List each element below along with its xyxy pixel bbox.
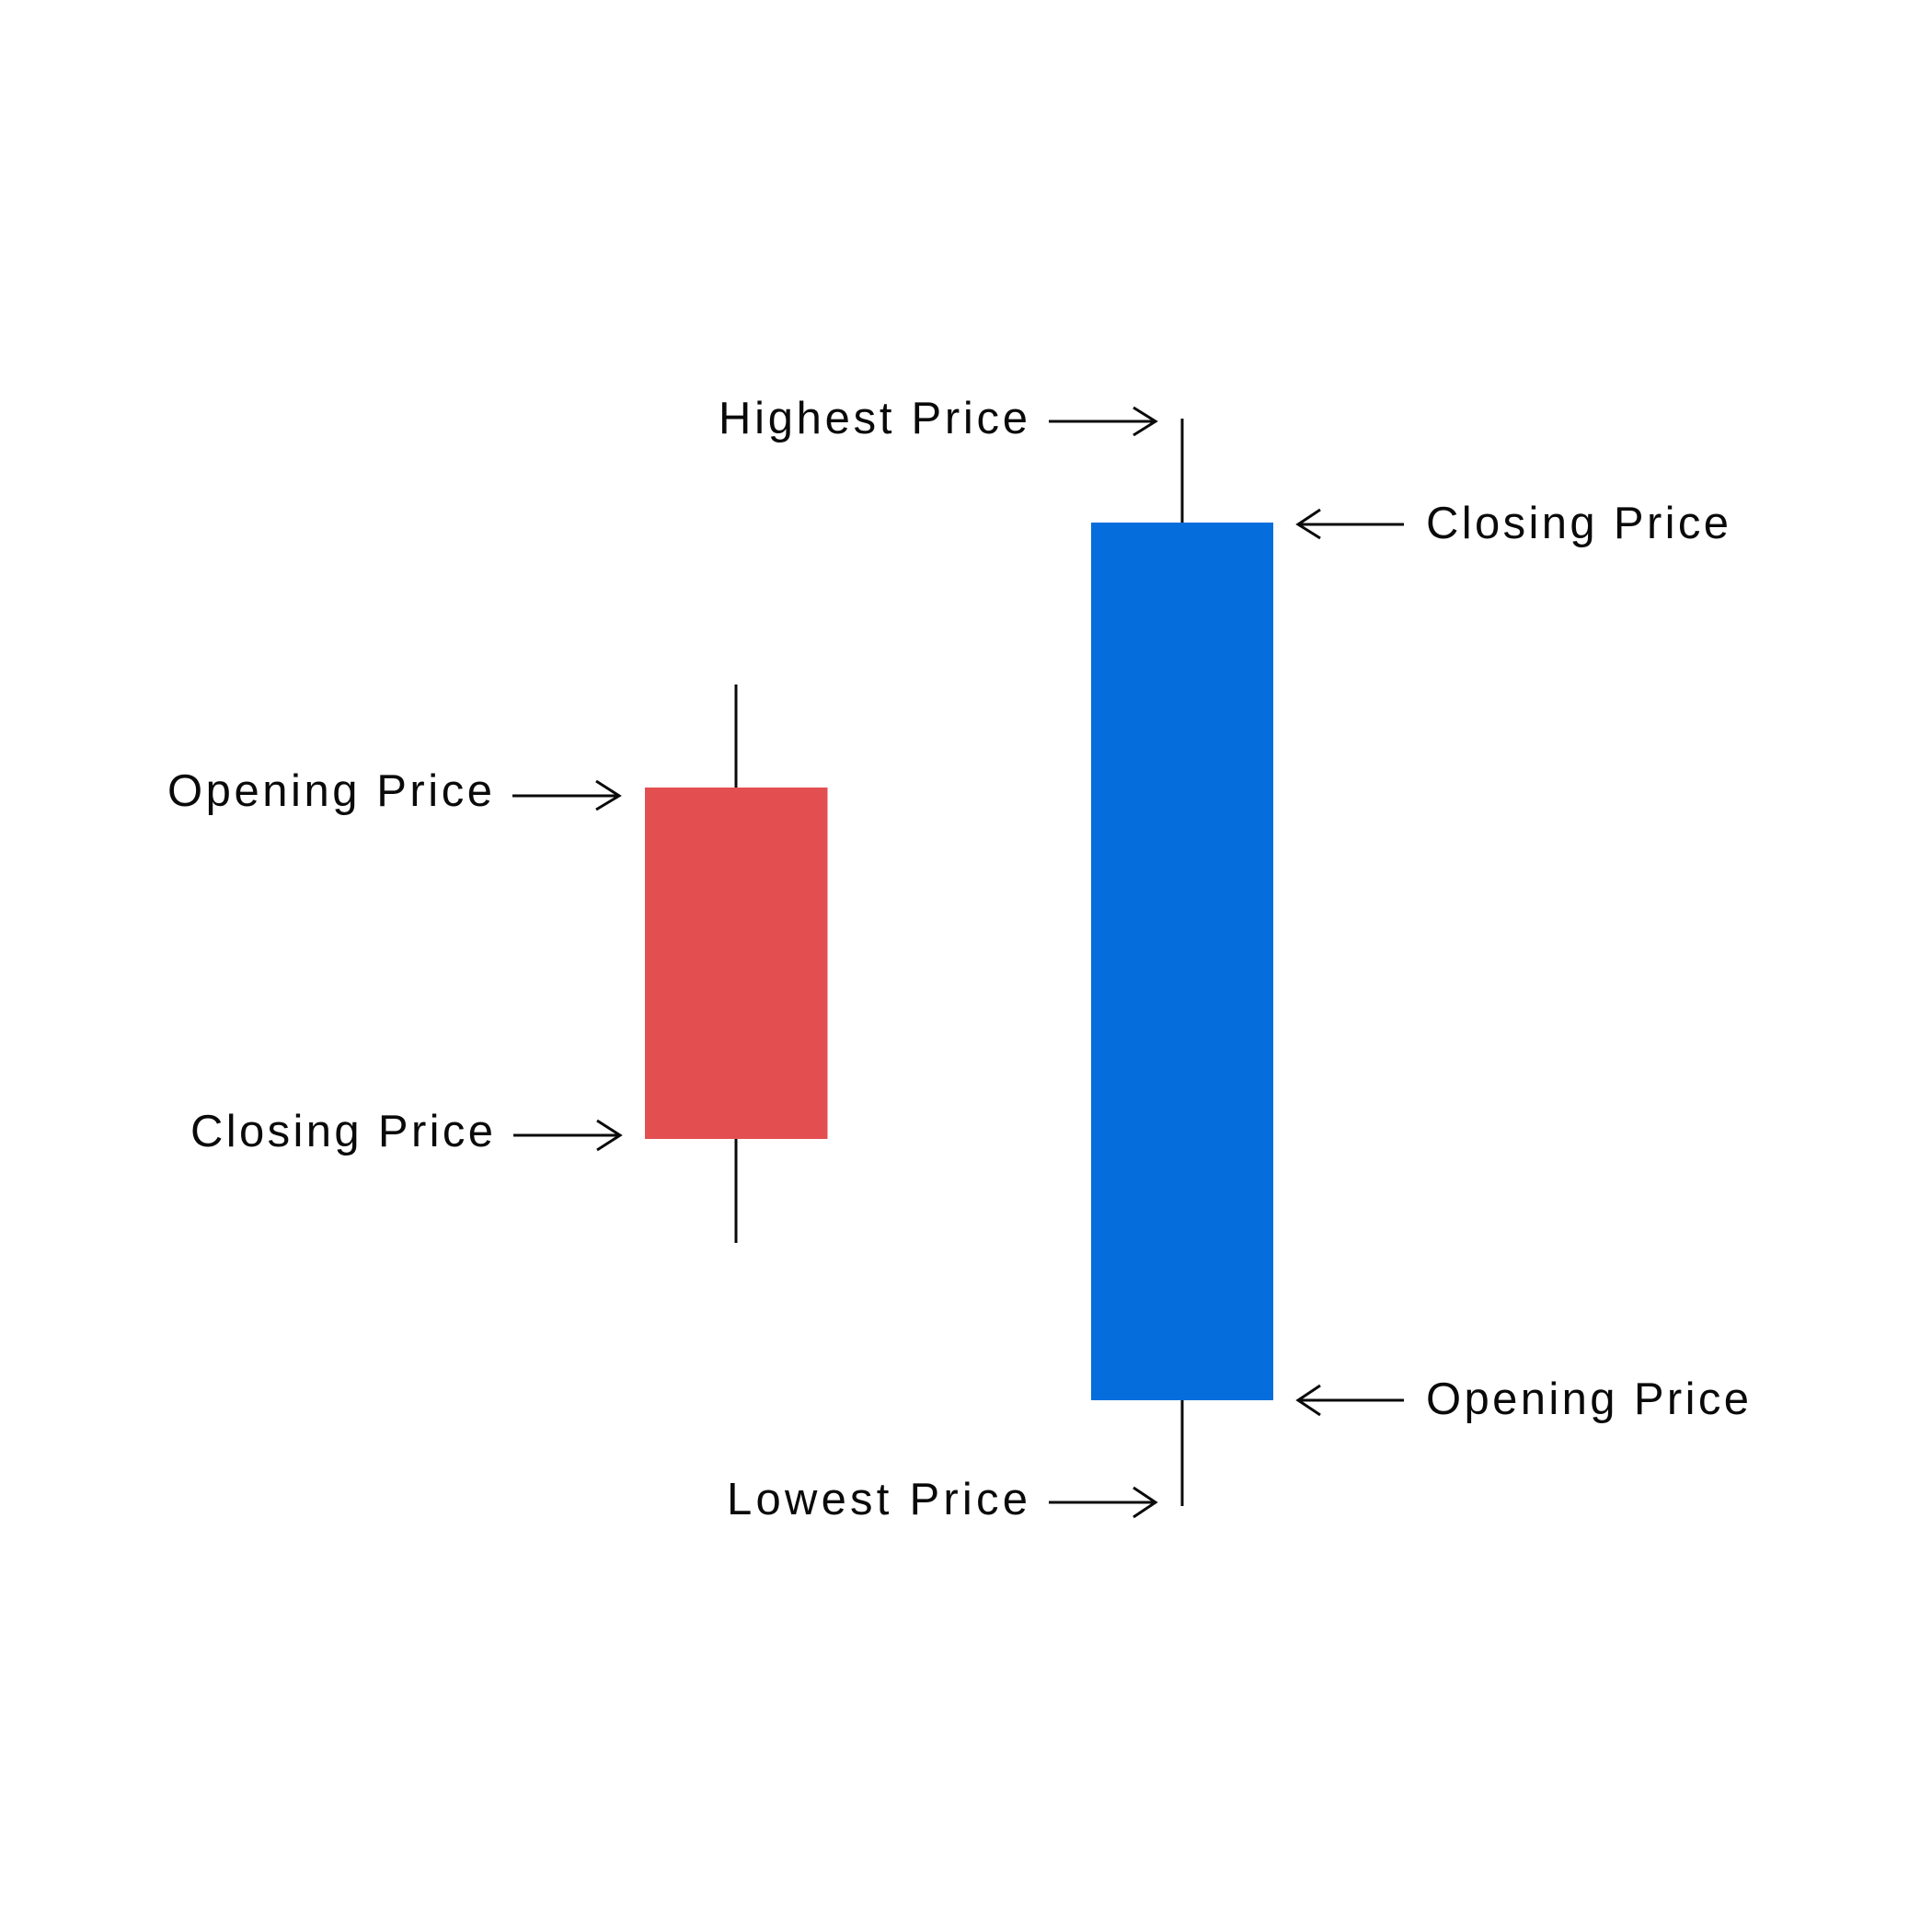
label: lowest price: Lowest Price [727,1475,1028,1524]
label: closing price, blue candle: Closing Price [1426,499,1729,548]
label: opening price, blue candle: Opening Price [1426,1374,1749,1424]
label: closing price, red candle: Closing Price [190,1107,493,1156]
label: opening price, red candle: Opening Price [167,766,492,816]
label: highest price: Highest Price [719,394,1028,443]
blue bullish candlestick [1091,419,1273,1506]
red bearish candlestick [645,684,828,1243]
